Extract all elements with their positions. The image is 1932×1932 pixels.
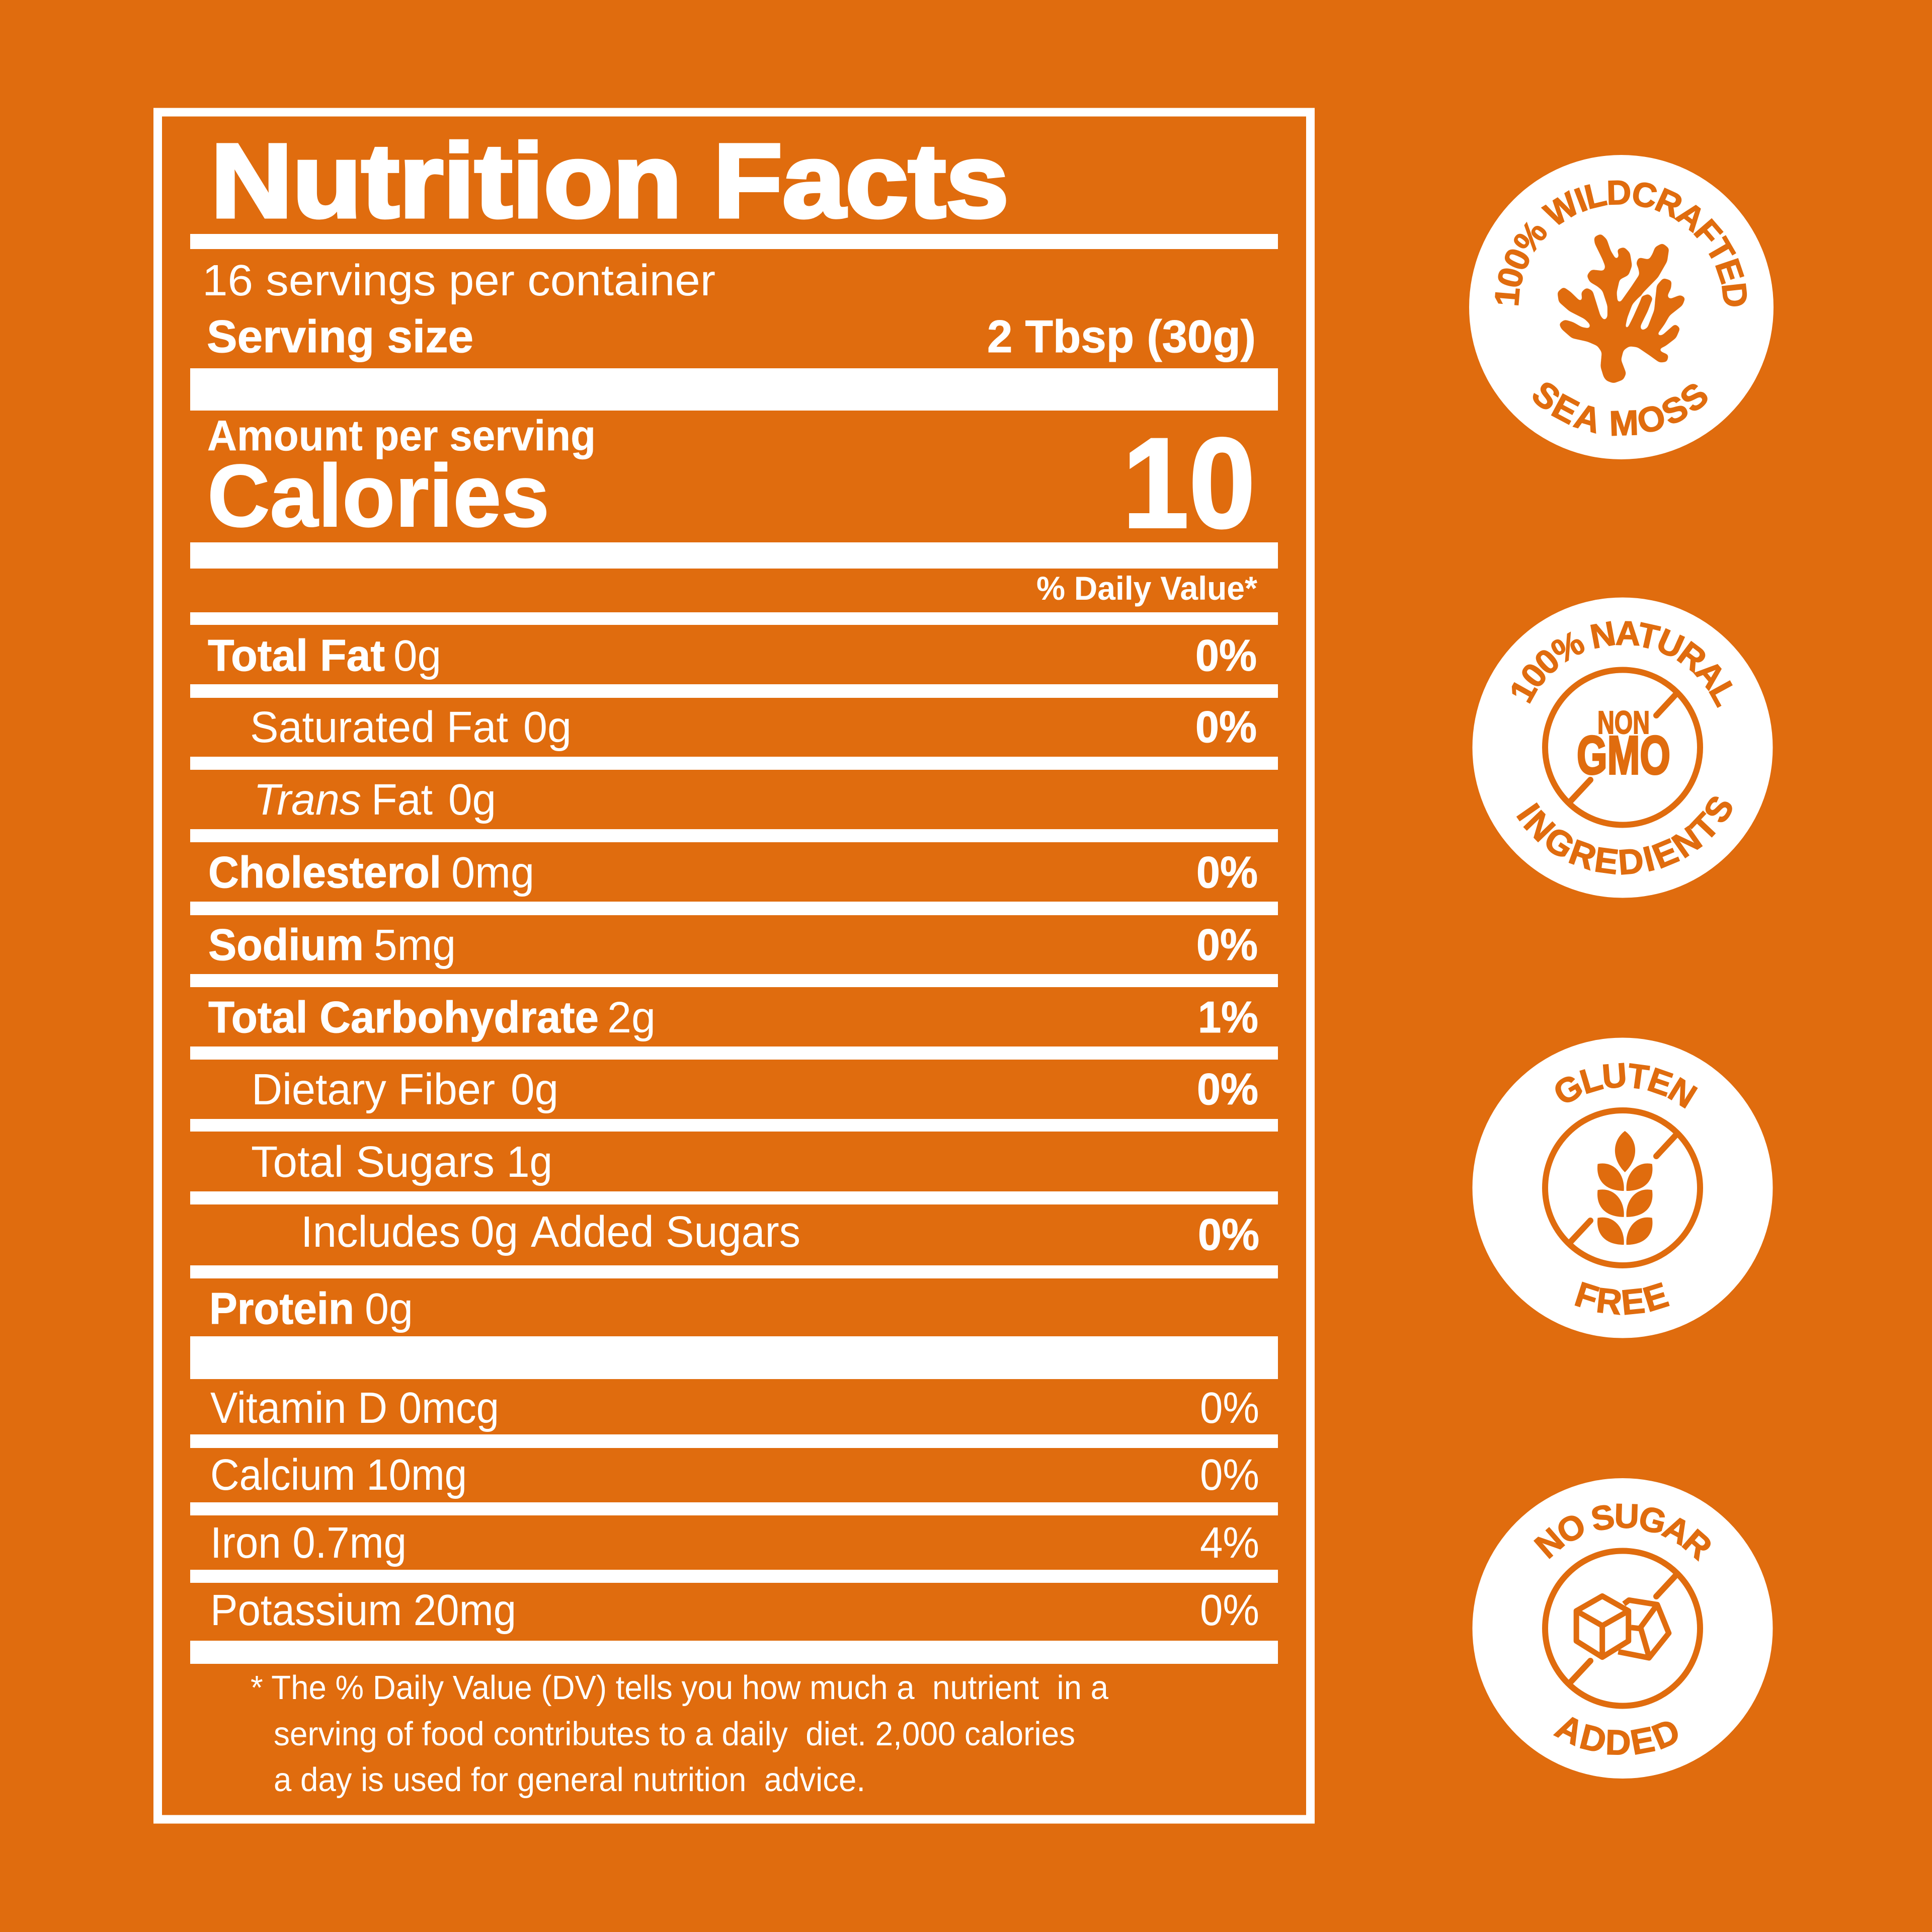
badge: natural non gmo [1472, 598, 1773, 898]
row: saturated fat [250, 702, 1257, 752]
row: total sugars: 1g [507, 1138, 552, 1186]
icon: wheat [1597, 1131, 1652, 1245]
badge text: free: FREE [1575, 1281, 1670, 1315]
icon text: gmo: GMO [1577, 725, 1670, 785]
row: protein: Protein [209, 1283, 354, 1333]
row: protein: 0g [365, 1284, 413, 1333]
icon: prohibition ring [1545, 1551, 1700, 1706]
badge text: added: ADDED [1553, 1717, 1678, 1755]
row: iron [210, 1518, 1259, 1567]
row: calcium: Calcium 10mg [210, 1451, 467, 1499]
row: total carbohydrate: 1% [1198, 992, 1258, 1042]
amount per serving: Amount per serving [207, 412, 596, 460]
row: added sugars: Added Sugars [531, 1208, 800, 1256]
panel frame [158, 112, 1310, 1819]
divider bars [190, 234, 1278, 1664]
row: potassium [210, 1586, 1259, 1635]
row: added sugars: 0g [470, 1208, 518, 1256]
row: dietary fiber [252, 1064, 1258, 1114]
calories value: 10 [1122, 412, 1255, 555]
row: total fat: Total Fat [208, 630, 385, 680]
badge text: 100% natural: 100% NATURAL [1511, 621, 1733, 708]
title: Nutrition Facts [211, 123, 1009, 239]
row: potassium: 0% [1200, 1586, 1259, 1635]
serving size value: 2 Tbsp (30g) [987, 311, 1256, 362]
icon: prohibition ring [1545, 670, 1700, 825]
row: vitamin d [210, 1384, 1259, 1432]
row: total fat: 0g [393, 631, 441, 680]
row: saturated fat: Saturated Fat [250, 703, 508, 752]
row: added sugars: 0% [1198, 1210, 1259, 1259]
panel: nutrition facts label [158, 112, 1310, 1819]
calories label: Calories [207, 447, 549, 545]
badge text: ingredients: INGREDIENTS [1516, 796, 1732, 875]
row: total carbohydrate: 2g [607, 993, 656, 1042]
row: calcium: 0% [1200, 1451, 1259, 1499]
row: potassium: Potassium 20mg [210, 1586, 516, 1635]
row: calcium [210, 1451, 1259, 1499]
badge: gluten free [1472, 1037, 1773, 1338]
row: total sugars: Total Sugars [251, 1138, 495, 1186]
row: total fat: 0% [1195, 630, 1257, 680]
row: trans fat: 0g [448, 775, 496, 824]
badge: no sugar added [1472, 1478, 1773, 1779]
row: cholesterol: 0mg [451, 848, 534, 897]
row: total carbohydrate [208, 992, 1258, 1042]
footnote [251, 1669, 1109, 1799]
row: saturated fat: 0% [1195, 702, 1257, 752]
daily value heading: % Daily Value* [1036, 570, 1257, 607]
icon text: non: NON [1597, 704, 1650, 741]
serving size label: Serving size [207, 311, 473, 362]
badge text: sea moss: SEA MOSS [1533, 382, 1708, 436]
row: trans fat: Fat [371, 775, 433, 824]
row: sodium: 0% [1196, 920, 1258, 970]
row: iron: 4% [1200, 1518, 1259, 1567]
icon: sugar cubes [1576, 1596, 1669, 1658]
row: vitamin d: Vitamin D 0mcg [210, 1384, 499, 1432]
icon: prohibition ring [1545, 1110, 1700, 1265]
badge text: no sugar: NO SUGAR [1534, 1503, 1711, 1562]
row: iron: Iron 0.7mg [210, 1518, 407, 1567]
row: cholesterol: Cholesterol [208, 847, 441, 897]
footnote: * The % Daily Value (DV) tells you how much a nutrient in a [251, 1669, 1109, 1707]
badge: wildcrafted sea moss [1469, 155, 1774, 459]
row: saturated fat: 0g [523, 703, 572, 752]
row: added sugars [301, 1208, 1259, 1259]
servings per container: 16 servings per container [202, 256, 715, 305]
badge text: gluten: GLUTEN [1555, 1063, 1698, 1109]
row: total carbohydrate: Total Carbohydrate [208, 992, 599, 1042]
row: sodium [208, 920, 1258, 970]
row: cholesterol: 0% [1196, 847, 1258, 897]
row: total fat [208, 630, 1257, 680]
footnote: serving of food contributes to a daily diet. 2,000 calories [274, 1715, 1075, 1753]
row: trans fat [254, 775, 496, 824]
row: dietary fiber: Dietary Fiber [252, 1065, 495, 1114]
row: vitamin d: 0% [1200, 1384, 1259, 1432]
footnote: a day is used for general nutrition advice. [274, 1761, 865, 1799]
row: added sugars: Includes [301, 1208, 460, 1256]
row: sodium: Sodium [208, 920, 364, 970]
row: sodium: 5mg [374, 921, 456, 970]
badge text: 100% wildcrafted: 100% WILDCRAFTED [1495, 180, 1747, 306]
row: dietary fiber: 0g [511, 1065, 558, 1114]
icon: sea moss coral [1558, 235, 1684, 382]
row: trans fat: Trans [254, 775, 361, 824]
row: dietary fiber: 0% [1197, 1064, 1258, 1114]
row: cholesterol [208, 847, 1258, 897]
